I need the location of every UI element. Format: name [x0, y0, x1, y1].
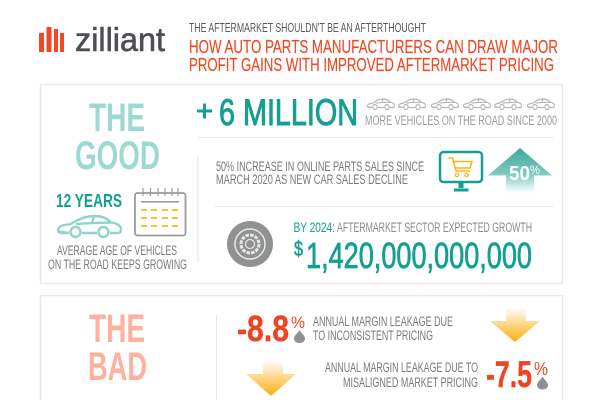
stat: minus 8.8 percent: %: [291, 313, 305, 332]
text: online parts sales: MARCH 2020 AS NEW CAR SALES DECLINE: [216, 172, 408, 187]
icons: row of six cars: [368, 99, 555, 110]
header: kicker and title: [189, 20, 558, 75]
text: online parts sales: [216, 159, 424, 187]
text: inconsistent pricing: [313, 314, 453, 343]
icon: monitor with shopping cart: [440, 152, 482, 192]
heading: the bad: THE: [89, 307, 145, 351]
text: misaligned pricing: ANNUAL MARGIN LEAKAGE DUE TO: [325, 360, 478, 375]
text: inconsistent pricing: ANNUAL MARGIN LEAKAGE DUE: [313, 314, 453, 329]
logo: zilliant: zilliant: [75, 21, 165, 58]
text: inconsistent pricing: TO INCONSISTENT PRICING: [313, 328, 433, 343]
text: by 2024: [294, 220, 532, 235]
heading: the bad: [88, 307, 147, 389]
stat: 12 years: 12 YEARS: [56, 191, 122, 211]
icon: calendar: [135, 188, 186, 236]
text: average age: [48, 243, 187, 272]
text: average age: AVERAGE AGE OF VEHICLES: [57, 243, 177, 258]
heading: the good: GOOD: [75, 134, 160, 178]
arrow: up 50 percent: 50: [509, 163, 530, 185]
arrow: down right: [490, 308, 540, 342]
heading: the good: [75, 96, 160, 178]
stat: 1.42 trillion: $: [294, 238, 303, 261]
arrow: up 50 percent: %: [530, 163, 540, 177]
text: average age: ON THE ROAD KEEPS GROWING: [48, 257, 187, 272]
icon: tire: [227, 221, 273, 267]
arrow: down left: [246, 361, 296, 396]
stat: minus 8.8 percent: -8.8: [237, 308, 289, 349]
panel: the bad: [40, 296, 562, 400]
stat: minus 7.5 percent: %: [534, 359, 548, 379]
text: by 2024: BY 2024:: [294, 220, 335, 235]
stat: plus 6 million: MILLION: [243, 91, 358, 133]
panel: the good: [40, 84, 562, 284]
heading: the good: THE: [89, 96, 145, 140]
stat: plus 6 million: [197, 91, 358, 133]
stat: minus 7.5 percent: -7.5: [486, 353, 532, 395]
arrow: up 50 percent: [488, 148, 552, 193]
icon: teal car: [58, 216, 121, 237]
text: misaligned pricing: [325, 360, 478, 390]
text: misaligned pricing: MISALIGNED MARKET PRICING: [343, 375, 478, 390]
heading: the bad: BAD: [88, 345, 147, 389]
stat: plus 6 million: 6: [219, 91, 235, 133]
text: online parts sales: 50% INCREASE IN ONLINE PARTS SALES SINCE: [216, 159, 424, 174]
header: kicker and title: THE AFTERMARKET SHOULDN'T BE AN AFTERTHOUGHT: [189, 20, 426, 35]
